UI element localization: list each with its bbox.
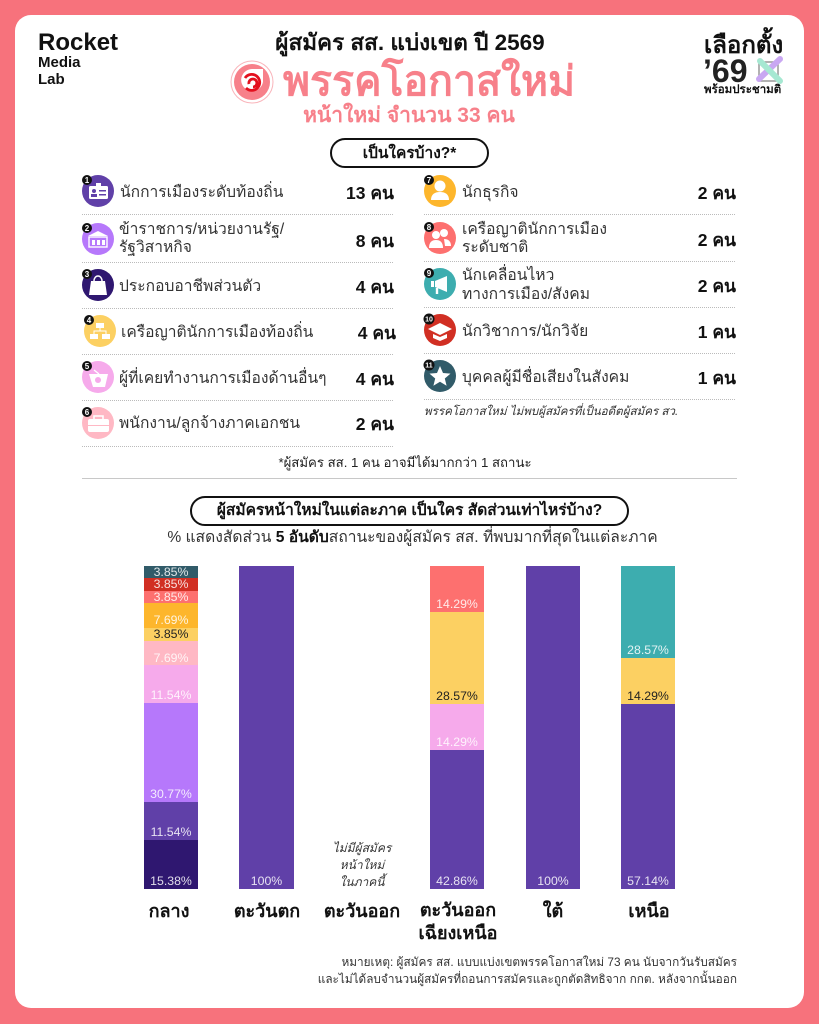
row 7 <box>424 175 736 207</box>
row 2: 2 <box>85 224 90 233</box>
bar: central <box>144 565 198 889</box>
row 4: 4 คน <box>358 323 396 343</box>
row 8: เครือญาตินักการเมือง <box>462 221 607 238</box>
row 9: 2 คน <box>698 276 736 296</box>
bar: central: 11.54% <box>151 825 191 839</box>
footnote: methodology <box>318 955 737 986</box>
row 11: 11 <box>425 362 433 370</box>
panel: right occupation list <box>424 175 736 400</box>
bar: northeast: 14.29% <box>436 597 478 611</box>
row 3: 3 <box>85 270 90 279</box>
row 8: 8 <box>427 223 432 232</box>
row 6: 6 <box>85 408 90 417</box>
row 5: 4 คน <box>356 369 394 389</box>
label: northeast: ตะวันออก <box>420 900 496 920</box>
row 2: รัฐวิสาหกิจ <box>119 239 192 256</box>
row 6: 2 คน <box>356 414 394 434</box>
bar: north: 57.14% <box>627 874 669 888</box>
chart subtitle: % แสดงสัดส่วน 5 อันดับสถานะของผู้สมัคร สส. ที่พบมากที่สุดในแต่ละภาค <box>167 529 658 546</box>
label: west: ตะวันตก <box>234 901 300 921</box>
row 10 <box>424 314 736 346</box>
icon: party logo <box>230 60 274 104</box>
row 11: บุคคลผู้มีชื่อเสียงในสังคม <box>462 369 629 386</box>
logo: Rocket Media Lab: Rocket <box>38 29 118 56</box>
bar: west <box>239 566 294 889</box>
row 5: 5 <box>85 362 90 371</box>
note: no former senators: พรรคโอกาสใหม่ ไม่พบผู้สมัครที่เป็นอดีตผู้สมัคร สว. <box>424 405 678 418</box>
bar: central: 7.69% <box>154 651 188 665</box>
logo: Rocket Media Lab <box>38 29 118 88</box>
bar: north <box>621 566 675 889</box>
bar: north: 14.29% <box>627 689 669 703</box>
row 7: 7 <box>427 176 432 185</box>
row 11 <box>424 360 736 392</box>
bar: northeast <box>430 566 484 889</box>
row 10: นักวิชาการ/นักวิจัย <box>462 323 588 340</box>
row 2: 8 คน <box>356 231 394 251</box>
row 4 <box>84 315 396 347</box>
bar: west: 100% <box>251 874 282 888</box>
region labels <box>149 900 670 943</box>
bar: central: 7.69% <box>154 613 188 627</box>
row 4: 4 <box>87 316 92 325</box>
logo: election 69: พร้อมประชามติ <box>704 84 781 96</box>
row 5: ผู้ที่เคยทำงานการเมืองด้านอื่นๆ <box>119 370 326 387</box>
row 9: ทางการเมือง/สังคม <box>462 286 590 303</box>
label: south: ใต้ <box>543 901 563 921</box>
row 9: 9 <box>427 269 432 278</box>
footnote: methodology: และไม่ได้ลบจำนวนผู้สมัครที่ถอนการสมัครและถูกตัดสิทธิจาก กกต. หลังจากนั้นออก <box>318 972 737 986</box>
row 1: 13 คน <box>346 183 394 203</box>
logo: election 69: เลือกตั้ง <box>704 32 783 59</box>
note: no candidates in east: หน้าใหม่ <box>340 858 384 872</box>
logo: election 69: ’69 <box>703 53 747 89</box>
row 2: ข้าราชการ/หน่วยงานรัฐ/ <box>119 221 284 238</box>
row 2 <box>82 221 394 256</box>
heading pill: by region: ผู้สมัครหน้าใหม่ในแต่ละภาค เป็นใคร สัดส่วนเท่าไหร่บ้าง? <box>217 502 602 519</box>
row 6: พนักงาน/ลูกจ้างภาคเอกชน <box>119 415 300 432</box>
row 6 <box>82 407 394 439</box>
bar: central: 15.38% <box>150 874 192 888</box>
bar: north: 28.57% <box>627 643 669 657</box>
bar: central: 3.85% <box>154 565 188 579</box>
label: northeast: เฉียงเหนือ <box>419 923 497 943</box>
label: east: ตะวันออก <box>324 901 400 921</box>
bar: northeast: 42.86% <box>436 874 478 888</box>
row 8: 2 คน <box>698 230 736 250</box>
bar: northeast: 14.29% <box>436 735 478 749</box>
heading pill: who are they: เป็นใครบ้าง?* <box>363 145 456 162</box>
bar: central: 3.85% <box>154 627 188 641</box>
row 10: 1 คน <box>698 322 736 342</box>
label: north: เหนือ <box>628 901 670 921</box>
row 3: ประกอบอาชีพส่วนตัว <box>119 278 261 295</box>
bar: central: 3.85% <box>154 577 188 591</box>
row 3: 4 คน <box>356 277 394 297</box>
row 9: นักเคลื่อนไหว <box>462 267 554 284</box>
logo: Rocket Media Lab: Media <box>38 54 81 71</box>
bar: south <box>526 566 580 889</box>
bar: south: 100% <box>537 874 569 888</box>
label: central: กลาง <box>149 901 189 921</box>
panel: left occupation list <box>82 175 396 447</box>
subtitle: 33 candidates: หน้าใหม่ จำนวน 33 คน <box>303 104 515 127</box>
row 4: เครือญาตินักการเมืองท้องถิ่น <box>121 324 313 341</box>
bar: northeast: 28.57% <box>436 689 478 703</box>
heading pill: who are they <box>330 138 489 168</box>
row 7: นักธุรกิจ <box>462 184 519 201</box>
bar: central: 30.77% <box>150 787 192 801</box>
footnote: methodology: หมายเหตุ: ผู้สมัคร สส. แบบแบ่งเขตพรรคโอกาสใหม่ 73 คน นับจากวันรับสมัคร <box>341 955 737 969</box>
row 9 <box>424 264 736 303</box>
bar: central: 3.85% <box>154 590 188 604</box>
title: ผู้สมัคร สส. แบ่งเขต ปี 2569 <box>275 30 545 55</box>
row 8: ระดับชาติ <box>462 239 528 256</box>
note: no candidates in east: ในภาคนี้ <box>340 875 384 889</box>
label: northeast <box>419 900 497 943</box>
heading pill: by region <box>190 496 629 526</box>
row 10: 10 <box>425 316 433 324</box>
logo: Rocket Media Lab: Lab <box>38 71 65 88</box>
row 3 <box>82 269 394 301</box>
row 1: นักการเมืองระดับท้องถิ่น <box>120 184 283 201</box>
row 5 <box>82 361 394 393</box>
note: no candidates in east <box>333 841 392 889</box>
footnote: multiple statuses: *ผู้สมัคร สส. 1 คน อาจมีได้มากกว่า 1 สถานะ <box>278 455 532 470</box>
row 1: 1 <box>85 176 90 185</box>
row 7: 2 คน <box>698 183 736 203</box>
party name heading: พรรคโอกาสใหม่ <box>283 58 575 104</box>
logo: election 69 <box>703 27 783 96</box>
note: no candidates in east: ไม่มีผู้สมัคร <box>333 841 391 855</box>
row 8 <box>424 220 736 256</box>
row 1 <box>82 175 394 207</box>
bar: central: 11.54% <box>151 688 191 702</box>
row 11: 1 คน <box>698 368 736 388</box>
